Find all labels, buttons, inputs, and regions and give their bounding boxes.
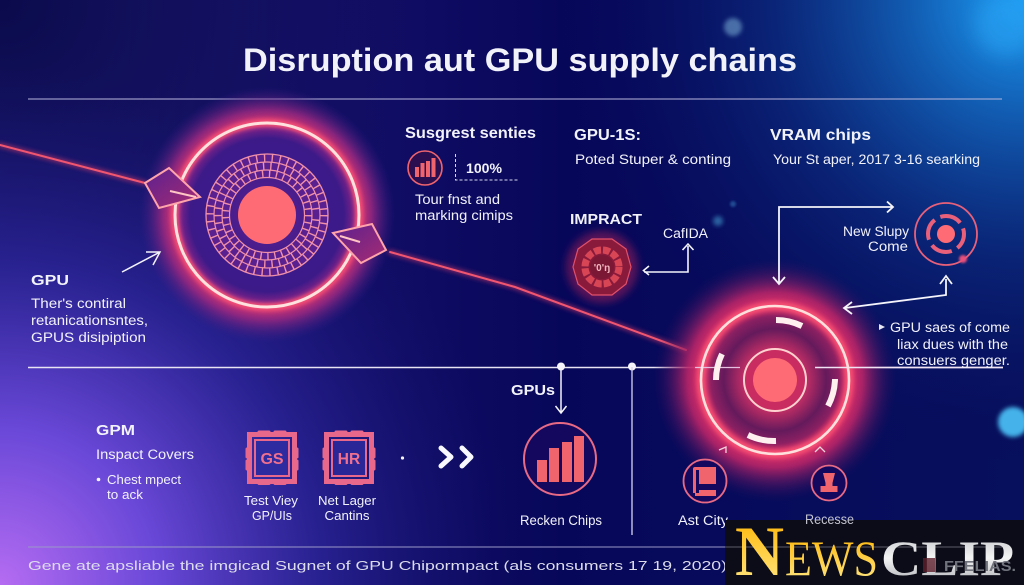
panel: suggest senties <box>405 125 536 223</box>
icon: target ring <box>915 203 977 265</box>
left connector <box>145 168 200 208</box>
gpu sales note: liax dues with the <box>897 337 1008 352</box>
chip label: test view: Test Viey <box>244 493 299 508</box>
gpu text block <box>31 272 148 345</box>
connector dots and vertical rule <box>556 362 636 535</box>
chip label: net lager <box>318 493 377 523</box>
gpu sales note <box>879 320 1010 368</box>
trend line <box>0 145 686 350</box>
chevron arrows <box>401 448 471 466</box>
arrow: ring to new supply <box>773 202 893 284</box>
chip label: test view <box>244 493 299 523</box>
panel: gpm impact <box>96 422 194 502</box>
icon: stamp <box>812 466 846 500</box>
bottom divider <box>28 546 1002 548</box>
chip icon: gs: GS <box>260 451 284 468</box>
panel: gpu-1s: GPU-1S: <box>574 127 641 144</box>
title: Disruption aut GPU supply chains <box>243 42 797 78</box>
gpu text block: retanicationsntes, <box>31 313 148 328</box>
gpu text block: GPUS disipiption <box>31 330 146 345</box>
panel: suggest senties: Susgrest senties <box>405 125 536 142</box>
icon: impact gear badge: '0'ŋ <box>594 263 610 274</box>
panel: vram chips: Your St aper, 2017 3-16 searking <box>773 152 980 167</box>
arrow <box>644 244 694 275</box>
gpu text block: Ther's contiral <box>31 296 126 311</box>
panel: gpu-1s: Poted Stuper & conting <box>575 152 731 167</box>
ast city label: Ast City <box>678 513 728 528</box>
gpus label: GPUs <box>511 382 555 399</box>
chip icon: hr: HR <box>338 451 360 468</box>
newsclip watermark: EWS <box>785 530 878 585</box>
panel: suggest senties: marking cimips <box>415 208 513 223</box>
gpu wafer ring graphic <box>139 87 395 343</box>
right connector <box>333 224 386 263</box>
icon: bar chart badge <box>408 151 442 185</box>
newsclip watermark: FFELIAS. <box>944 558 1016 575</box>
bokeh lights <box>713 0 1024 437</box>
panel: gpu-1s <box>574 127 731 167</box>
wafer grid <box>206 154 328 276</box>
panel: new supply come: Come <box>868 239 908 254</box>
panel: gpm impact: Inspact Covers <box>96 447 194 462</box>
chip label: net lager: Net Lager <box>318 493 377 508</box>
core <box>238 186 296 244</box>
chip label: test view: GP/UIs <box>252 508 292 523</box>
arrow to wafer <box>122 252 160 272</box>
icon: phone <box>684 460 726 502</box>
newsclip watermark: CLIP <box>881 530 1014 585</box>
chip icon: gs <box>247 432 297 484</box>
core <box>753 358 797 402</box>
arrow: new supply to ring <box>844 276 952 314</box>
panel: gpm impact: to ack <box>107 487 144 502</box>
panel: vram chips <box>770 127 980 167</box>
middle divider <box>28 366 1003 368</box>
panel: suggest senties: 100% <box>466 161 502 176</box>
panel: impact: CafIDA <box>663 226 708 241</box>
dashed callout <box>456 154 518 180</box>
panel: gpm impact: GPM <box>96 422 135 439</box>
chip icon: hr <box>324 432 374 484</box>
icon: impact gear badge <box>566 231 638 303</box>
gpu sales note: consuers genger. <box>897 353 1010 368</box>
recesse label: Recesse <box>805 512 854 527</box>
panel: impact <box>566 211 708 303</box>
footer note: Gene ate apsliable the imgicad Sugnet of GPU Chipormpact (als consumers 17 19, 2020) <box>28 558 727 573</box>
panel: impact: IMPRACT <box>570 211 642 228</box>
icon: recken chips chart <box>524 423 596 495</box>
panel: vram chips: VRAM chips <box>770 127 871 144</box>
panel: new supply come: New Slupy <box>843 224 909 239</box>
panel: new supply come <box>843 203 977 265</box>
recken chips label: Recken Chips <box>520 513 602 528</box>
newsclip watermark <box>725 513 1024 585</box>
chip label: net lager: Cantins <box>324 508 370 523</box>
panel: suggest senties: Tour fnst and <box>415 192 500 207</box>
panel: gpm impact: Chest mpect <box>107 472 181 487</box>
gpu text block: GPU <box>31 272 69 289</box>
inner ring segments <box>716 320 835 441</box>
gpu sales note: GPU saes of come <box>890 320 1010 335</box>
central disruption ring graphic <box>653 258 1003 502</box>
top divider <box>28 98 1002 100</box>
small ticks <box>719 447 825 453</box>
